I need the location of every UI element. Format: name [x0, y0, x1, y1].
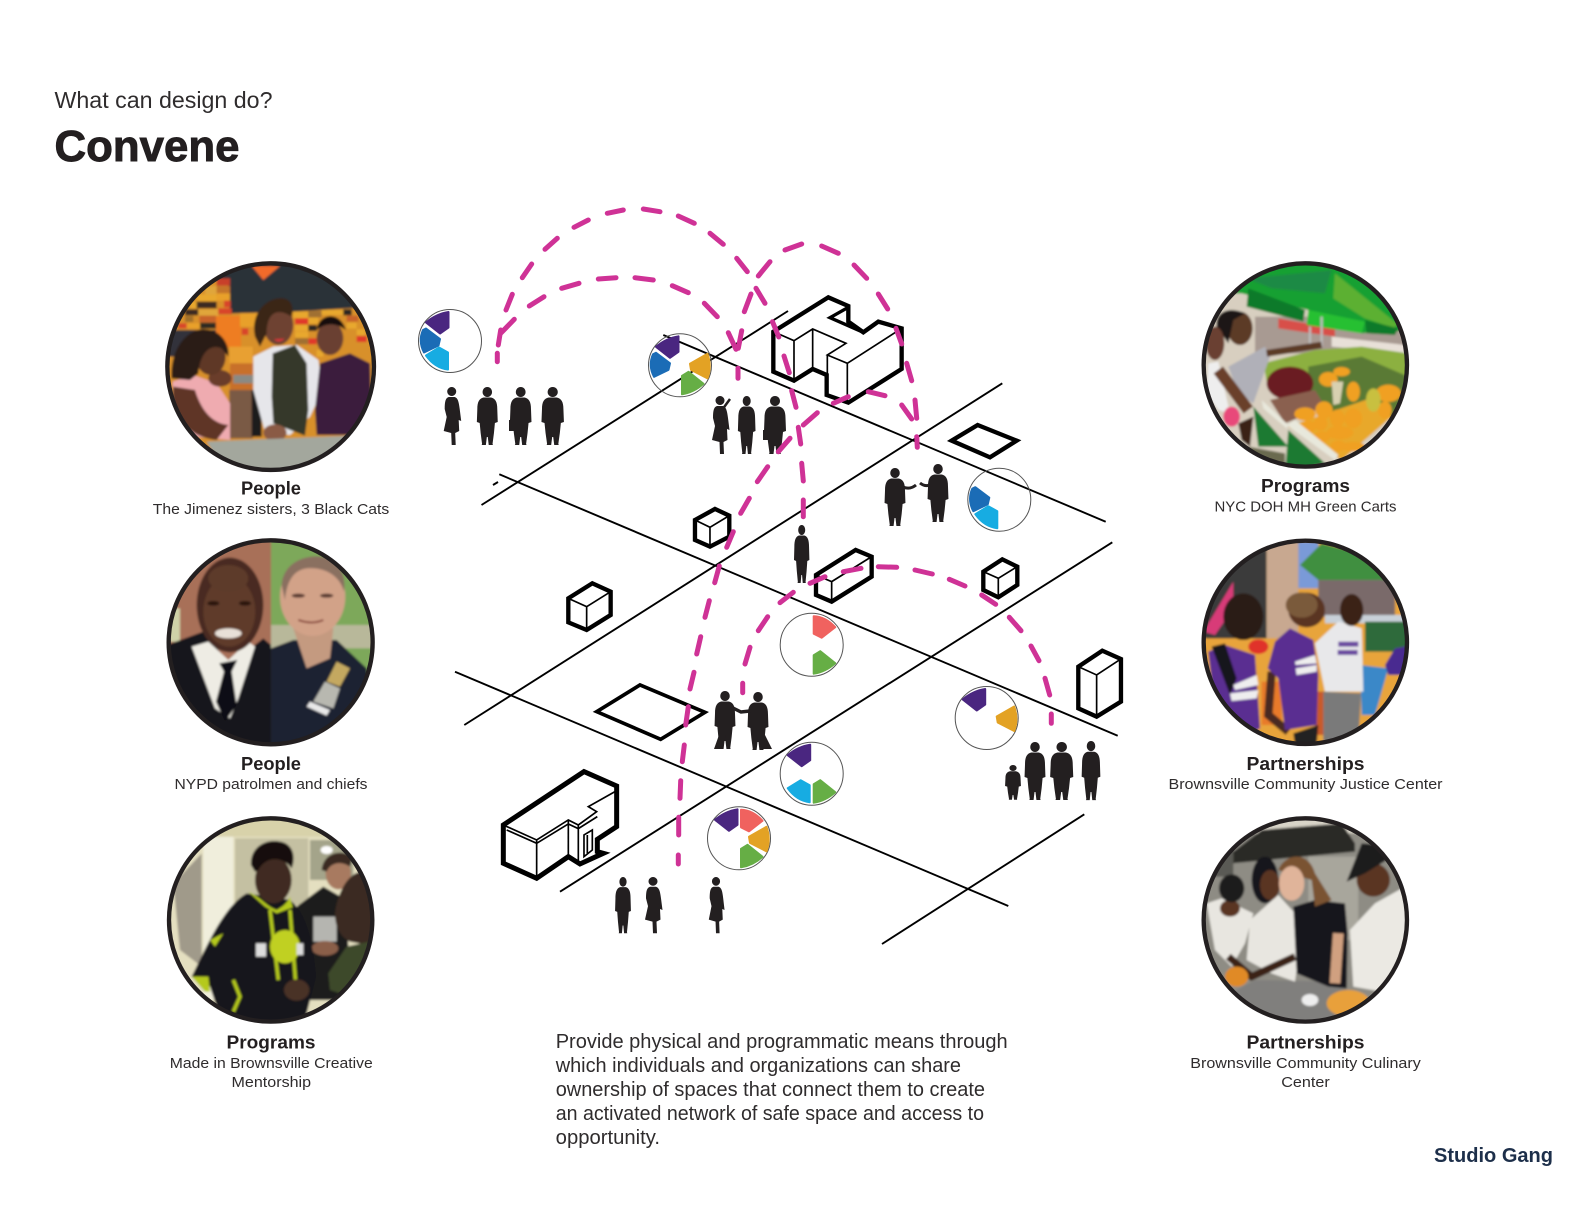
network badge: red and green — [780, 613, 843, 676]
caption: People, Jimenez sisters: People — [241, 478, 301, 498]
caption: Programs, Green Carts: Programs — [1261, 475, 1350, 496]
building: cube east — [983, 559, 1017, 597]
caption: Programs, Made in Brownsville: Programs — [226, 1032, 316, 1052]
caption: People, NYPD: People — [241, 753, 301, 774]
photo: NYPD patrolmen and chiefs — [163, 535, 378, 752]
description paragraph: opportunity. — [556, 1127, 660, 1149]
caption: Partnerships, Culinary Center: Center — [1281, 1074, 1330, 1091]
caption: People, NYPD: NYPD patrolmen and chiefs — [174, 776, 368, 793]
people group south — [615, 877, 725, 933]
photo: The Jimenez sisters — [163, 260, 380, 477]
caption: Programs, Green Carts — [1214, 475, 1396, 516]
title: Convene — [54, 122, 240, 171]
photo: Green Carts produce stand — [1198, 260, 1415, 477]
arc: outer northwest — [497, 209, 803, 517]
caption: Partnerships, Culinary Center — [1190, 1032, 1421, 1091]
network badge: purple and gold — [955, 686, 1018, 750]
arc: inner northwest — [501, 278, 738, 378]
caption: Partnerships, Justice Center: Brownsville Community Justice Center — [1168, 776, 1442, 793]
caption: Partnerships, Justice Center — [1168, 753, 1442, 793]
caption: Programs, Green Carts: NYC DOH MH Green Carts — [1214, 498, 1396, 516]
caption: People, Jimenez sisters: The Jimenez sisters, 3 Black Cats — [153, 501, 389, 518]
caption: People, NYPD — [174, 753, 368, 793]
network badge: four partners south — [708, 807, 770, 870]
arc: north — [738, 244, 917, 447]
photo: Justice Center youth mural — [1198, 535, 1415, 752]
description paragraph — [555, 1031, 1008, 1149]
building: small cube — [695, 509, 729, 547]
lone pedestrian — [794, 525, 809, 583]
street grid — [455, 311, 1118, 944]
credit: Studio Gang: Studio Gang — [1434, 1145, 1553, 1167]
building: long box — [816, 550, 872, 602]
handshake pair south — [714, 691, 772, 750]
dashed connection arcs — [497, 209, 1051, 864]
building: cube west — [568, 583, 611, 630]
family group east — [1005, 741, 1100, 800]
plaza outline north — [952, 425, 1017, 457]
caption: Programs, Made in Brownsville — [170, 1032, 373, 1091]
people group northwest — [444, 387, 564, 445]
building: H-shaped block — [773, 297, 902, 403]
building: low corner building — [503, 772, 617, 878]
network badge: four partners north — [648, 334, 712, 397]
network badge: three partners west — [418, 310, 482, 372]
caption: People, Jimenez sisters — [153, 478, 389, 518]
subtitle: What can design do? — [54, 87, 272, 113]
network badge: purple, cyan, green — [780, 742, 843, 805]
photo: Made in Brownsville mentorship — [163, 813, 380, 1030]
description paragraph: an activated network of safe space and access to — [556, 1103, 984, 1125]
caption: Partnerships, Culinary Center: Partnerships — [1246, 1032, 1364, 1052]
description paragraph: Provide physical and programmatic means through — [556, 1031, 1008, 1053]
description paragraph: which individuals and organizations can share — [555, 1055, 961, 1077]
caption: Programs, Made in Brownsville: Mentorship — [232, 1074, 311, 1091]
people group north — [712, 396, 786, 454]
caption: Partnerships, Justice Center: Partnerships — [1246, 753, 1364, 774]
arc: long south to northeast — [678, 392, 912, 864]
network badge: two partners northeast — [968, 468, 1031, 531]
plaza outline south — [597, 685, 705, 739]
caption: Programs, Made in Brownsville: Made in Brownsville Creative — [170, 1055, 373, 1072]
handshake pair northeast — [885, 464, 948, 526]
photo: Culinary Center kitchen — [1198, 813, 1415, 1030]
arc: south to east — [743, 567, 1051, 723]
caption: Partnerships, Culinary Center: Brownsville Community Culinary — [1190, 1055, 1421, 1072]
building: tall box — [1078, 651, 1121, 717]
description paragraph: ownership of spaces that connect them to create — [556, 1079, 985, 1101]
